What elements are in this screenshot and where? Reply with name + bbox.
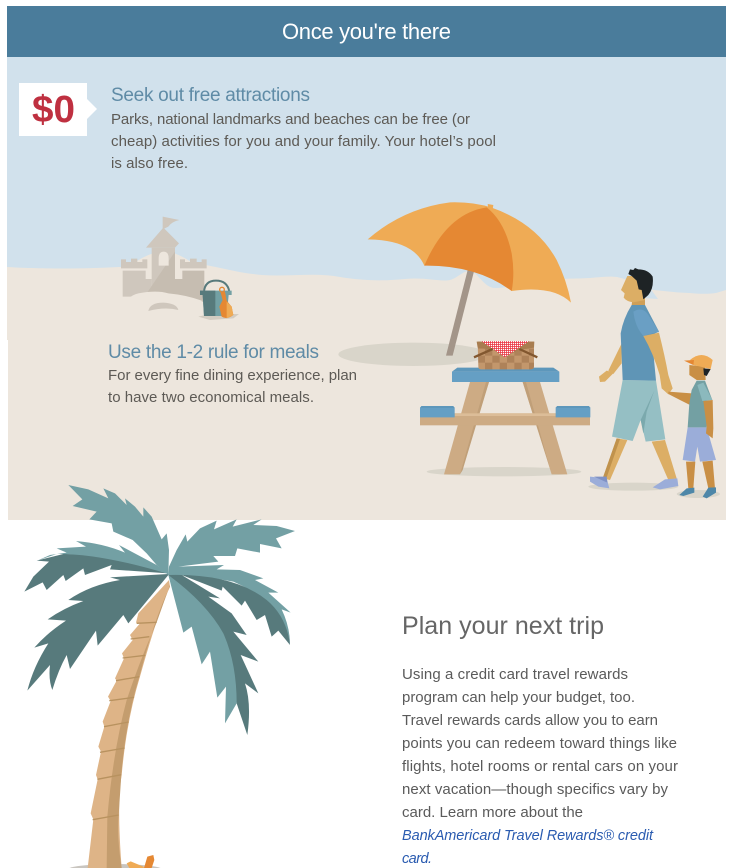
text block: credit card travel rewards: card. Learn more about the [402, 804, 583, 821]
text block: credit card travel rewards: next vacation—though specifics vary by [402, 781, 668, 798]
trunk [88, 580, 170, 868]
text block: 1-2 rule for meals: to have two economical meals. [108, 389, 314, 406]
illustration: sandcastle and bucket [121, 217, 239, 320]
header bar [7, 6, 726, 57]
callout: $0 tag [19, 83, 97, 136]
text block: seek out free attractions: cheap) activities for you and your family. Your hotel’s pool [111, 133, 496, 150]
text block: credit card travel rewards: Using a credit card travel rewards [402, 666, 628, 683]
icon: bucket and shovel [198, 281, 239, 320]
fronds [24, 485, 295, 735]
icon: picnic basket [474, 341, 537, 369]
illustration: palm tree [24, 485, 295, 868]
illustration: man walking [588, 268, 678, 491]
text block: 1-2 rule for meals: For every fine dining experience, plan [108, 367, 357, 384]
text block: credit card travel rewards [402, 666, 678, 867]
illustration: boy walking [668, 355, 720, 498]
heading: plan your next trip: Plan your next trip [402, 612, 604, 640]
text block: 1-2 rule for meals: Use the 1-2 rule for meals [108, 342, 319, 363]
text block: credit card travel rewards: points you can redeem toward things like [402, 735, 677, 752]
panel: beach scene background [7, 57, 726, 520]
illustration: umbrella [338, 202, 571, 366]
illustration: picnic table with basket [420, 341, 590, 476]
shadow and starfish [67, 855, 163, 868]
callout: $0 tag: $0 [32, 89, 75, 131]
text block: seek out free attractions: Seek out free attractions [111, 85, 310, 106]
text block: seek out free attractions [111, 85, 496, 172]
text block: 1-2 rule for meals [108, 342, 357, 406]
text block: credit card travel rewards: card. [402, 851, 432, 867]
text block: seek out free attractions: Parks, national landmarks and beaches can be free (or [111, 111, 470, 128]
text block: seek out free attractions: is also free. [111, 155, 188, 172]
text block: credit card travel rewards: BankAmericard Travel Rewards® credit [402, 828, 654, 844]
text block: credit card travel rewards: flights, hotel rooms or rental cars on your [402, 758, 678, 775]
text block: credit card travel rewards: program can help your budget, too. [402, 689, 635, 706]
heading: once you're there: Once you're there [282, 19, 451, 44]
text block: credit card travel rewards: Travel rewards cards allow you to earn [402, 712, 658, 729]
